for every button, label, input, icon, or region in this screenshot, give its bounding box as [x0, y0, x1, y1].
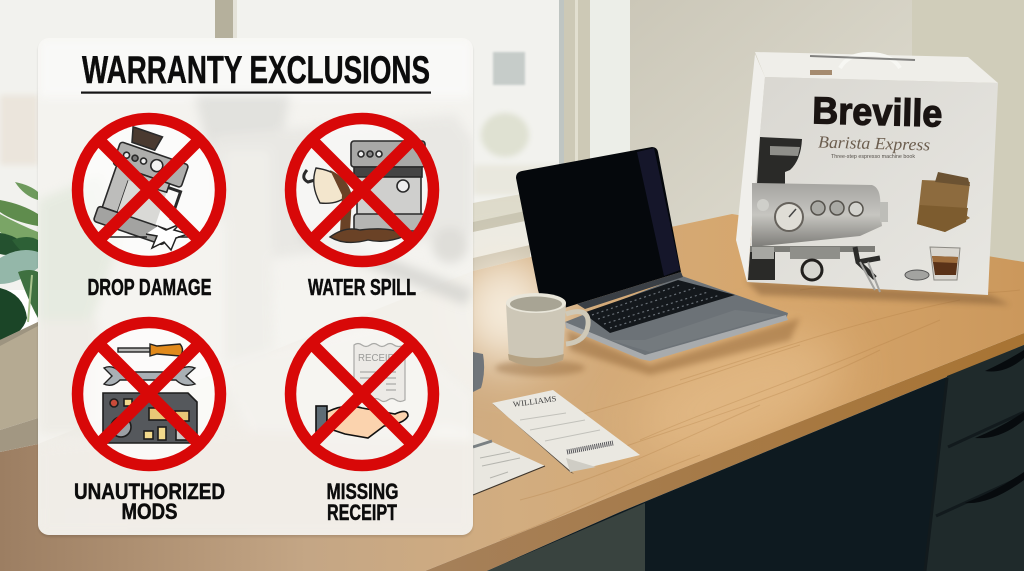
icon: prohibition ring: [290, 118, 434, 262]
desk top: [0, 214, 1024, 571]
exclusion: water spill: [290, 118, 434, 300]
label: DROP DAMAGE: [88, 274, 212, 300]
laptop base: [565, 276, 788, 360]
shipping box: [736, 52, 1010, 305]
dark object beside panel: [473, 352, 484, 392]
icon: prohibition ring: [290, 322, 434, 466]
label: MISSING: [326, 479, 398, 504]
icon: disc: [77, 118, 221, 262]
receipt lines: [520, 413, 600, 441]
box handle: [840, 54, 900, 68]
box coffee bag: [917, 172, 970, 232]
panel shadow: [38, 40, 473, 537]
box front: [747, 77, 998, 295]
laptop: [516, 147, 800, 375]
label line 2: RECEIPT: [327, 500, 397, 525]
icon: espresso machine: [351, 141, 425, 231]
box product name: Barista Express: [818, 133, 931, 154]
desk front edge: [425, 333, 1024, 571]
box shadow: [745, 280, 1010, 305]
box espresso glass: [905, 247, 960, 280]
icon: disc: [77, 322, 221, 466]
title: WARRANTY EXCLUSIONS: [82, 49, 430, 92]
box brand: Breville: [812, 90, 943, 136]
icon: wrench: [104, 367, 195, 385]
icon: screwdriver: [118, 344, 182, 356]
panel background: [38, 38, 473, 535]
desk light and grain: [455, 255, 1020, 540]
box top: [755, 52, 998, 83]
icon: faded receipt: RECEIPT: [358, 353, 400, 364]
label: WATER SPILL: [308, 274, 416, 300]
panel: warranty exclusions: [38, 38, 473, 537]
receipt barcode: [567, 443, 613, 452]
laptop keyboard: [583, 280, 735, 333]
box machine picture: [748, 137, 888, 292]
icon: impact burst: [146, 224, 188, 250]
exclusion: unauthorized mods: [74, 322, 225, 524]
receipt text: WILLIAMS: [512, 394, 557, 409]
icon: disc: [290, 118, 434, 262]
small paper under panel: [473, 433, 545, 495]
plant: [0, 182, 38, 340]
icon: tipped cup and spill: [304, 168, 405, 242]
window view: [0, 0, 570, 290]
mug: [495, 293, 588, 376]
title underline: [81, 92, 431, 94]
icon: prohibition ring: [78, 322, 220, 466]
icon: tilted espresso machine: [93, 125, 196, 245]
laptop shadow: [567, 318, 800, 375]
laptop screen: [516, 147, 681, 314]
icon: faded receipt: [354, 344, 405, 402]
exclusion: missing receipt: [290, 322, 434, 525]
box side: [736, 54, 765, 282]
label line 2: MODS: [122, 499, 178, 524]
exclusion: drop damage: [77, 118, 221, 300]
icon: disc: [290, 322, 434, 466]
icon: prohibition ring: [78, 118, 220, 262]
icon: open hand: [316, 406, 408, 438]
receipt: [492, 390, 640, 474]
window frame and sill: [473, 0, 590, 271]
ghosted machine behind panel: [38, 38, 473, 535]
desk cabinets: [487, 345, 1024, 571]
plant pot: [0, 322, 38, 452]
icon: circuit board: [103, 393, 197, 443]
wall: [590, 0, 1024, 270]
label: UNAUTHORIZED: [74, 479, 225, 504]
box subtitle: Three-step espresso machine book: [831, 154, 915, 160]
